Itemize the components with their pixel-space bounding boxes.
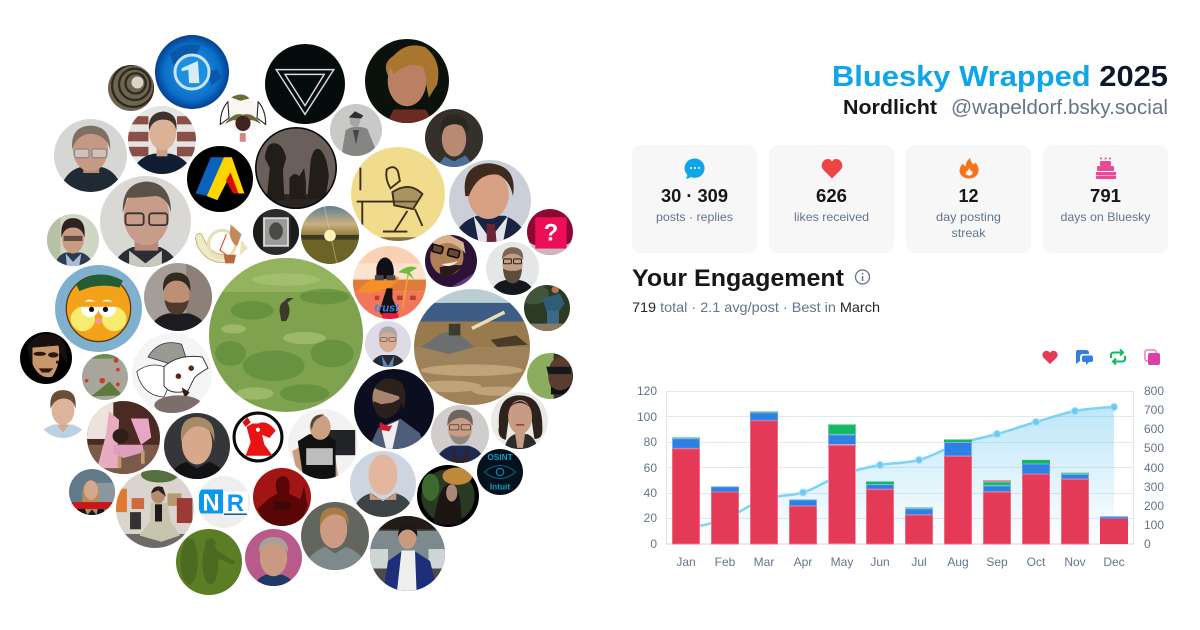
avatar: crimson square question logo: ? [544,219,558,246]
x axis month labels [676,555,1125,569]
left axis labels: 120 [637,384,657,398]
grid lines [666,391,1134,544]
cumulative line [686,407,1114,528]
icon: like heart [1042,351,1058,364]
right axis labels: 200 [1144,499,1164,513]
x axis month labels: Jun [870,555,890,569]
cumulative area [686,407,1114,544]
right axis labels: 0 [1144,537,1151,551]
avatar: bearded man in dark suit [144,263,212,331]
label: likes received [794,210,869,224]
bar: May [828,425,856,544]
avatar: grey-haired man with glasses in navy jacket [431,405,489,463]
bar: September [983,480,1011,544]
avatar: dog with moustache [220,94,266,142]
bar: June [866,482,894,544]
avatar: OSINT Intuit logo: Intuit [490,482,510,491]
avatar: man in blue blazer [370,516,445,591]
x axis month labels: Feb [715,555,736,569]
avatar: man with grey hair and glasses [54,119,127,192]
avatar: sunset over field [301,206,359,264]
avatar: crimson square question logo [527,209,573,255]
avatar: man with glasses, large [100,176,191,267]
avatar: bald man with dotted shirt [350,451,416,517]
avatar: poppies on grey pavement [82,354,128,400]
cumulative dots [800,404,1118,496]
avatar: man with auburn hair (dark background) [365,39,449,123]
label: day posting [936,210,1001,224]
right axis labels: 100 [1144,518,1164,532]
right axis labels: 400 [1144,461,1164,475]
engagement chart [637,384,1164,569]
avatar: smiling man in blue shirt [47,214,99,266]
avatar: green silhouette couple [176,529,242,595]
bar: January [672,437,700,544]
avatar: man in front of bookshelves [128,106,196,174]
avatar: young man in light shirt [44,390,82,438]
icon: quote squares [1145,350,1160,365]
avatar bubble cloud [20,35,573,595]
value: 30 · 309 [661,186,728,206]
avatar: woman on TV with red banner [69,469,115,515]
avatar: smiling man in suit and tie [449,160,531,242]
avatar: blue globe [155,35,229,109]
left axis labels: 80 [644,435,657,449]
left axis labels: 60 [644,461,657,475]
avatar: man in metal band shirt [288,409,358,479]
avatar: Daffy duck with sunglasses [353,246,426,319]
x axis month labels: Apr [794,555,812,569]
x axis month labels: Oct [1027,555,1046,569]
icon: repost arrows [1111,350,1125,364]
avatar: bearded man with glasses, black polo [486,242,539,295]
x axis month labels: May [831,555,853,569]
x axis month labels: Jul [911,555,927,569]
bar: February [712,487,738,544]
label line two: streak [952,226,987,240]
right axis labels: 700 [1144,403,1164,417]
icon: flame [960,158,979,178]
avatar: yellow sketch of seated figure [351,147,445,241]
avatar: NR logo [198,476,250,528]
stat card: posts and replies [632,145,757,253]
engagement summary: 719 total · 2.1 avg/post · Best in March [632,299,880,315]
avatar: Ukraine coloured A logo [187,146,253,212]
avatar: lion relief black and white [253,209,299,255]
avatar: large meadow with bird [209,258,363,412]
avatar: man with dark hair, dark background [425,109,483,167]
avatar: OSINT Intuit logo [477,449,523,495]
axes baseline [666,543,1134,545]
right axis labels: 800 [1144,384,1164,398]
label: days on Bluesky [1060,210,1150,224]
left axis labels: 100 [637,410,657,424]
right axis labels: 500 [1144,441,1164,455]
bar: October [1022,460,1050,544]
x axis month labels: Jan [676,555,696,569]
icon: info [856,270,870,284]
stat card: likes received [769,145,894,253]
avatar: woman with dark curly hair [491,392,548,449]
avatar: black triangle logo [265,44,345,124]
avatar: Garfield with beret [55,265,142,352]
heading: Your Engagement: Your Engagement [632,265,844,292]
avatar: cartoon elephant drawing [132,333,212,413]
left axis labels: 20 [644,511,657,525]
left axis labels [637,384,657,551]
x axis month labels: Mar [754,555,774,569]
value: 791 [1090,186,1121,206]
avatar: man with sunglasses and green leaves [527,353,573,399]
left axis labels: 40 [644,486,657,500]
icon: chat bubble [685,158,705,179]
value: 12 [958,186,978,206]
avatar: man in grey shirt [301,502,369,570]
avatar: woman with long hair, black ring [417,465,479,527]
user name: Nordlicht [843,97,937,119]
avatar: dark red silhouette [253,468,311,526]
bar: August [944,440,972,544]
avatar: black and white officer [330,104,382,156]
avatar: NR logo: R [227,490,244,517]
avatar: soldiers silhouette [255,127,337,209]
right axis labels: 300 [1144,480,1164,494]
bar: April [790,500,816,544]
x axis month labels: Nov [1064,555,1086,569]
right axis labels: 600 [1144,422,1164,436]
bar: July [905,507,933,544]
stat card: day posting streak [906,145,1031,253]
chart legend [1042,350,1160,365]
label: posts · replies [656,210,733,224]
bar: November [1061,473,1089,544]
icon: heart [822,159,842,178]
left axis labels: 0 [650,537,657,551]
avatar: red cartoon bird crest [232,412,284,462]
avatar: man with long dark hair, red-brown face [20,332,72,384]
icon: birthday cake [1096,158,1116,179]
avatar: tank firing a missile [414,289,530,405]
avatar: bearded man with red bow tie [354,369,434,449]
value: 626 [816,186,847,206]
avatar: laughing man in glasses, purple tones [425,235,477,287]
right axis labels [1144,384,1164,551]
avatar: blond man on dark background [164,413,230,479]
title: Bluesky Wrapped 2025 [832,61,1168,93]
stat card: days on Bluesky [1043,145,1168,253]
stacked bars [672,411,1128,544]
icon: reply bubbles [1076,350,1093,365]
bar: March [750,411,778,544]
user handle: @wapeldorf.bsky.social [951,97,1168,119]
x axis month labels: Aug [947,555,969,569]
avatar: Daffy duck with sunglasses: trust [374,303,400,315]
avatar: post horn [195,224,248,264]
avatar: man outdoors, denim [524,285,570,331]
avatar: smiling man with glasses, blue shirt [365,321,411,367]
x axis month labels: Sep [986,555,1008,569]
avatar: OSINT Intuit logo: OSINT [487,453,513,462]
avatar: man on magenta background [245,529,302,586]
bar: December [1100,516,1128,544]
x axis month labels: Dec [1103,555,1125,569]
avatar: NR logo: N [202,489,220,516]
avatar: spiral tunnel [108,65,154,111]
avatar: pug in pink costume [87,401,160,474]
avatar: woman sitting, studio wall [116,470,194,548]
